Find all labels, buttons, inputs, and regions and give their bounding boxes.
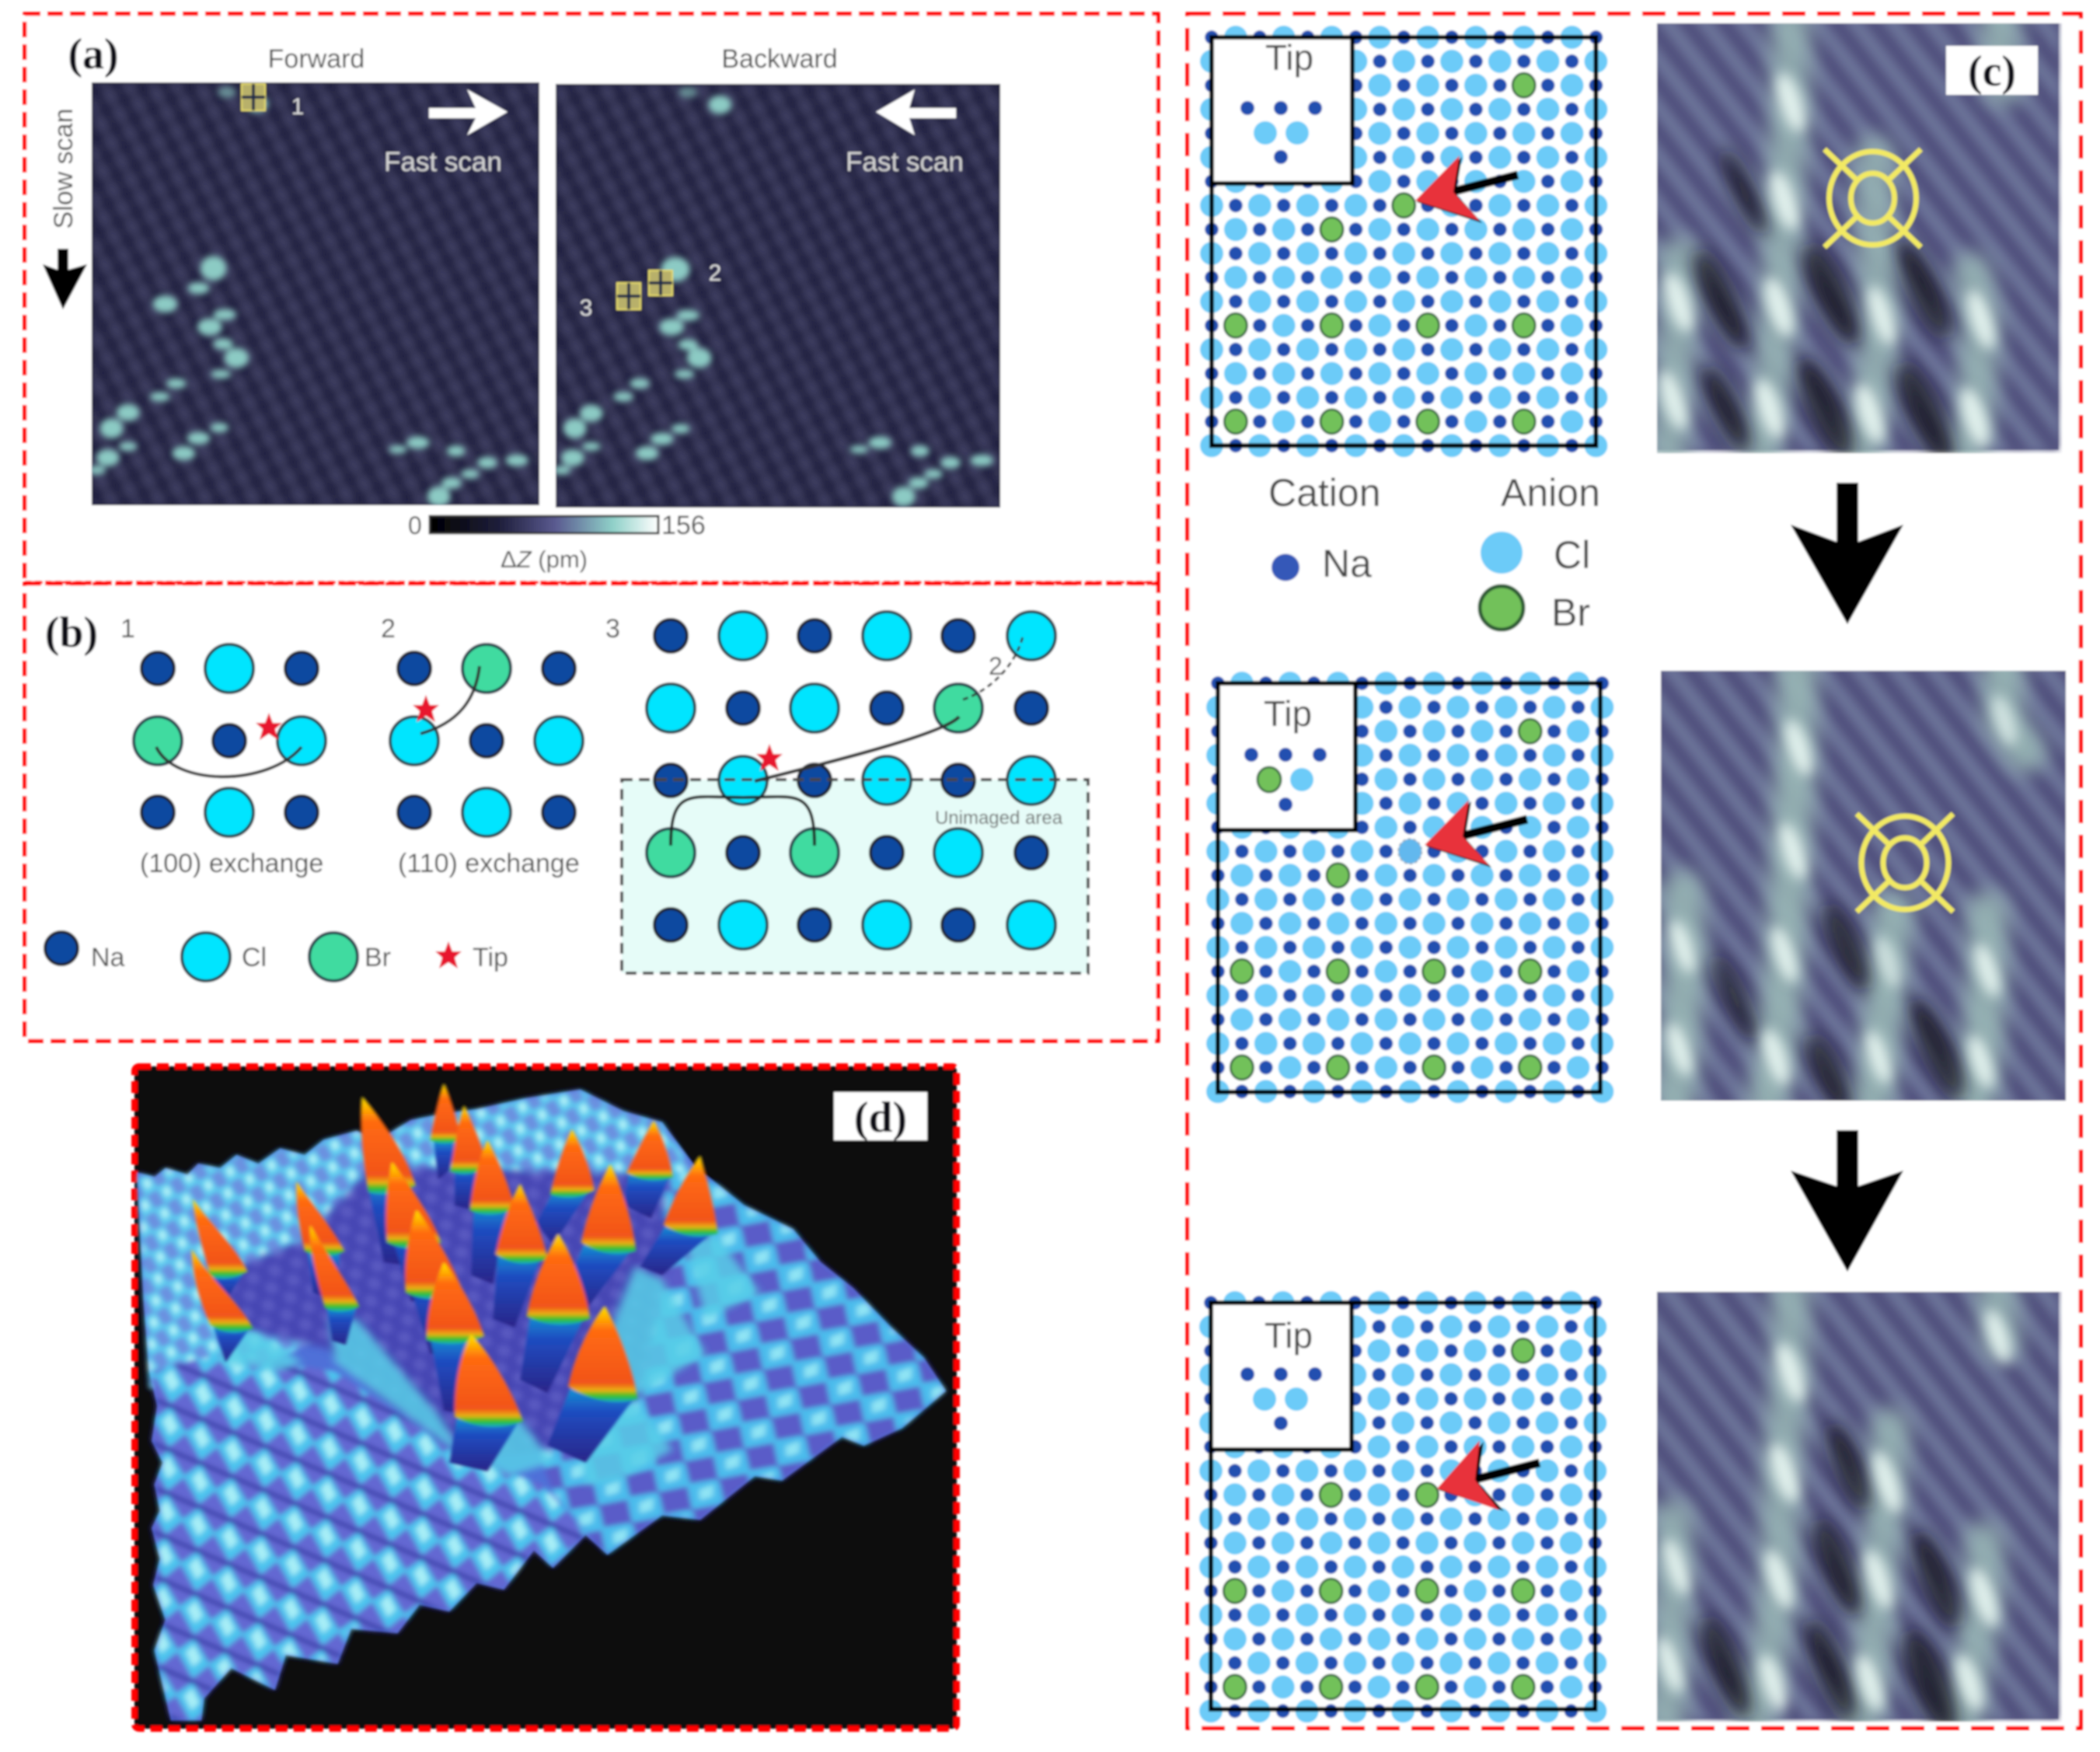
white label box (d): (d): [854, 1094, 907, 1142]
image: backward scan: [554, 84, 1000, 508]
legend: cations and anions: Na: [1322, 542, 1372, 585]
diagram 3: long-range exchange with unimaged area: [605, 612, 1088, 973]
markers 2 and 3: [617, 270, 672, 309]
diagram 2: (110) exchange: [381, 614, 583, 878]
number labels: 2: [709, 260, 721, 286]
arrow: tip position 2: [1425, 800, 1527, 867]
tip inset 3: Tip: [1265, 1315, 1313, 1356]
legend: Na: [91, 943, 125, 972]
label (b): (b): [45, 609, 98, 657]
colour bar: ΔZ (pm): [501, 546, 588, 573]
number labels: [291, 94, 721, 321]
panel: (a) forward and backward scans: [25, 14, 1158, 583]
panel: (d) 3D topography: [134, 1066, 957, 1729]
colour bar: 0: [408, 511, 422, 539]
legend: [45, 932, 508, 981]
label: fast scan forward: Fast scan: [384, 147, 502, 177]
tip inset 2: [1218, 683, 1355, 830]
lattice diagram 3: [1199, 1291, 1606, 1722]
diagram 1: (100) exchange: [120, 614, 326, 878]
white label box (c): (c): [1968, 47, 2016, 96]
heading: Forward: Forward: [268, 44, 365, 74]
axis label: slow scan: Slow scan: [49, 109, 78, 229]
target marker 2: [1857, 814, 1953, 912]
tip inset 2: Tip: [1264, 693, 1312, 734]
arrow: tip position 1: [1415, 155, 1518, 223]
legend: cations and anions: [1268, 471, 1600, 634]
3D surface plot: [138, 1084, 946, 1720]
tip inset 3: [1211, 1303, 1352, 1450]
legend: cations and anions: Cl: [1554, 533, 1590, 577]
legend: Tip: [473, 943, 508, 972]
diagram 1: (100) exchange: 1: [120, 614, 135, 644]
diagram 2: (110) exchange: (110) exchange: [398, 849, 580, 878]
peaks: [192, 1084, 717, 1471]
diagram 2: (110) exchange: 2: [381, 614, 396, 644]
arrow: step 2 to 3: [1791, 1130, 1903, 1272]
arrow: fast scan forward: [429, 89, 508, 135]
legend: Cl: [242, 943, 267, 972]
legend: cations and anions: Br: [1551, 591, 1590, 634]
arrow: tip position 3: [1437, 1440, 1540, 1511]
colour bar: [408, 511, 706, 573]
lattice diagram 1: [1200, 26, 1607, 457]
number labels: 3: [580, 295, 592, 321]
arrow: fast scan backward: [876, 89, 956, 135]
target marker 1: [1825, 149, 1921, 247]
heading: Backward: Backward: [721, 44, 838, 74]
tip inset 1: [1212, 37, 1352, 183]
STM image 1: [1649, 16, 2059, 471]
white label box (d): [834, 1092, 927, 1142]
image: forward scan: [89, 82, 539, 505]
label (a): (a): [68, 30, 119, 79]
lattice diagram 2: [1206, 672, 1613, 1103]
diagram 3: long-range exchange with unimaged area: 3: [605, 614, 620, 644]
legend: cations and anions: Anion: [1501, 471, 1600, 515]
diagram 1: (100) exchange: (100) exchange: [140, 849, 323, 878]
panel: (b) exchange mechanisms: [25, 583, 1158, 1041]
STM image 2: [1653, 663, 2073, 1118]
STM image 3: [1649, 1284, 2059, 1741]
diagram 3: long-range exchange with unimaged area: Unimaged area: [935, 808, 1063, 829]
diagram 3: long-range exchange with unimaged area: 2: [989, 652, 1003, 680]
legend: Br: [365, 943, 391, 972]
arrow: step 1 to 2: [1791, 483, 1903, 624]
tip inset 1: Tip: [1265, 37, 1313, 78]
panel: (c) atom exchange sequence: [1188, 14, 2081, 1741]
number labels: 1: [291, 94, 304, 120]
white label box (c): [1946, 46, 2038, 96]
legend: cations and anions: Cation: [1268, 471, 1381, 515]
arrow: slow scan direction: [43, 249, 87, 309]
colour bar: 156: [661, 511, 706, 540]
label: fast scan backward: Fast scan: [846, 147, 964, 177]
marker 1: [242, 84, 265, 110]
